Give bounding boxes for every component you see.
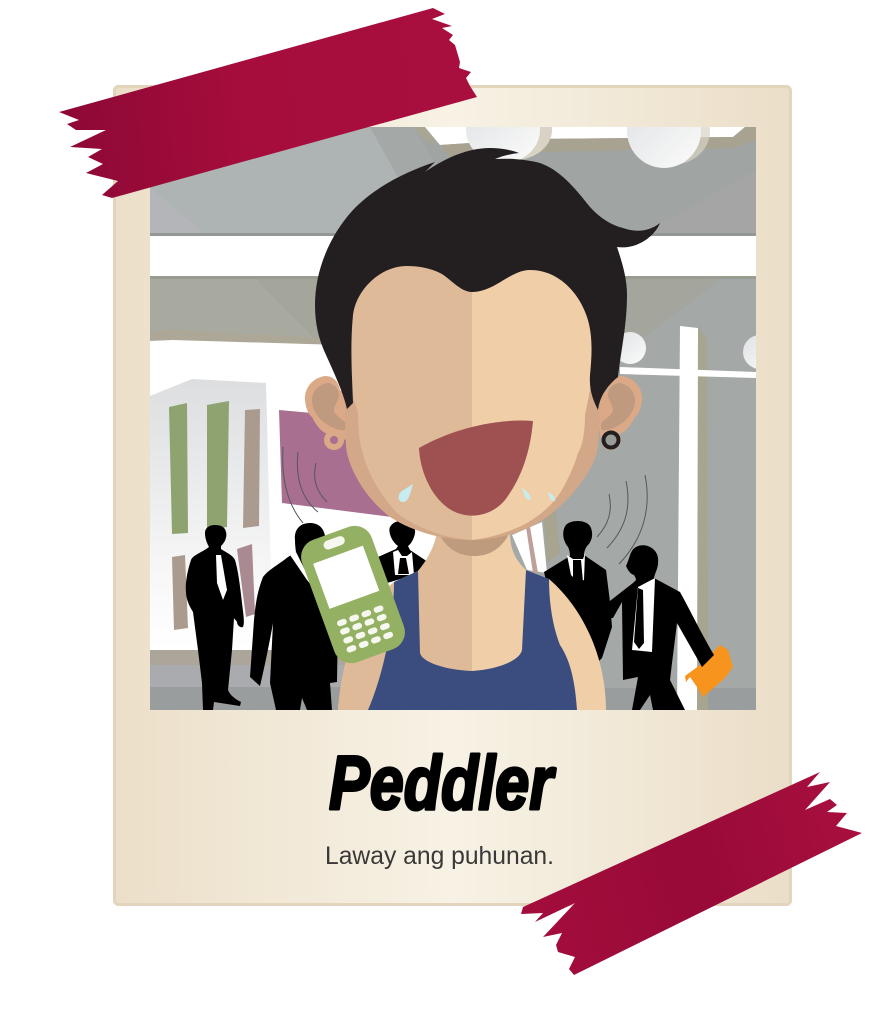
ceiling lamps [466,127,756,368]
jaw shading [345,380,600,540]
tagline: Laway ang puhunan. [325,842,554,870]
floor [150,650,756,710]
silhouette: man with back turned [250,523,338,710]
tape bottom [521,772,862,975]
silhouette: man behind neck [378,521,428,583]
mouth [419,421,533,516]
icon: green mobile phone [301,526,405,664]
icon: orange folder [685,645,733,697]
building with windows [150,379,273,650]
phone body [301,526,405,664]
polaroid card [114,86,790,904]
hair [315,148,660,410]
title: Peddler [329,741,557,826]
neck shadow [440,535,508,556]
phone screen [313,546,379,609]
tape top [59,8,477,198]
face left half [345,262,472,540]
blue tank top [368,570,577,710]
person [305,148,660,710]
sound waves right [597,475,647,564]
right ear [595,376,642,440]
phone keypad [336,605,394,653]
neck and shoulders [338,533,606,710]
left ear [304,376,346,440]
silhouette: man left [186,525,244,710]
photo [150,94,777,710]
white post and cross bar [620,326,756,710]
face right half [472,262,595,540]
white and tan wedge behind neck [512,510,560,573]
background: office interior [150,94,777,710]
right earring [601,430,621,450]
silhouette: walking man [606,545,714,710]
silhouette: man facing left [544,521,612,661]
phone speaker [324,536,345,550]
purple wall panel [279,410,400,518]
left earring [324,434,344,450]
spit droplets [399,484,555,502]
sound waves left [283,447,327,523]
